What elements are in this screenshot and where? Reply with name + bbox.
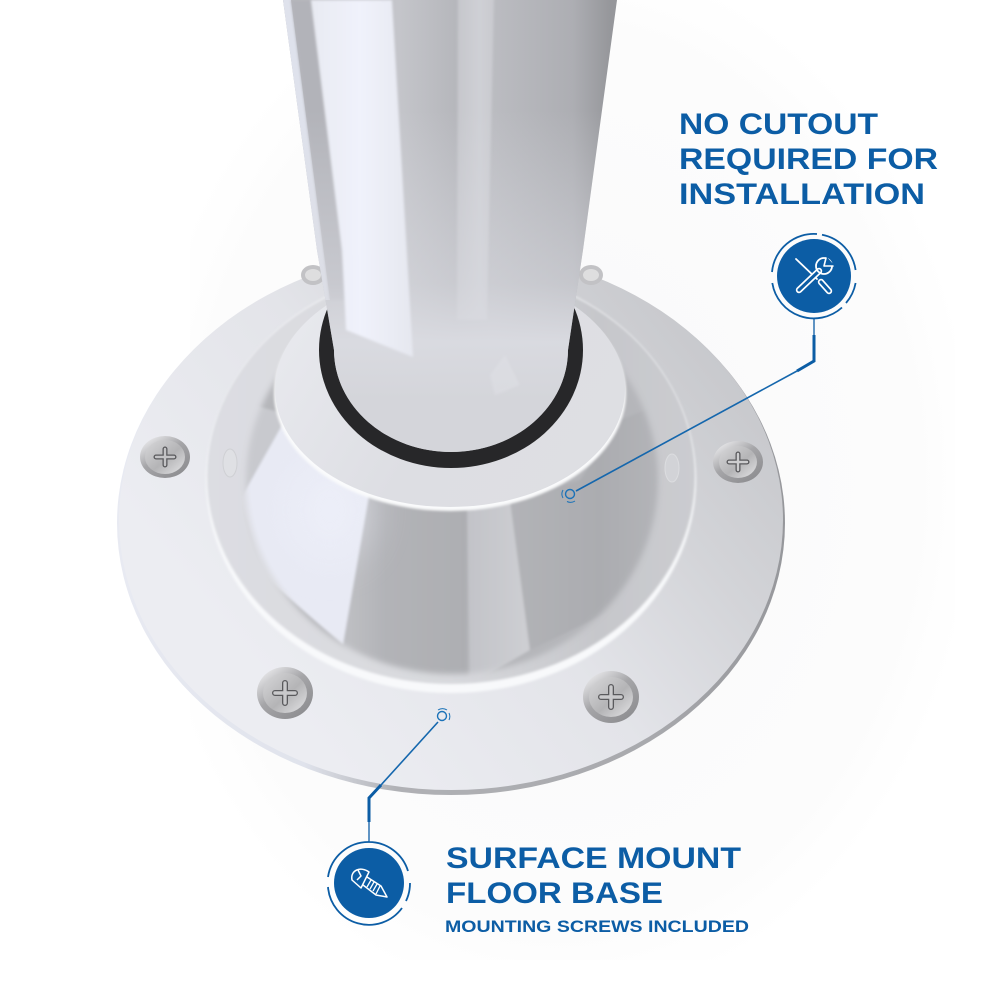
dome shading (246, 375, 659, 676)
callout: surface mount (328, 709, 749, 936)
screw: left (140, 436, 190, 478)
callout: no cutout required (562, 108, 938, 502)
screw: rear left (301, 265, 325, 285)
heading: NO CUTOUT (679, 108, 878, 141)
outer flange (117, 250, 785, 795)
seal ring (319, 232, 583, 468)
leader line (562, 318, 814, 502)
pole (270, 0, 630, 460)
dome rivet: left (223, 449, 237, 477)
dome rivet: right (665, 454, 679, 482)
target marker (438, 709, 450, 720)
dome rim (206, 267, 696, 693)
floor base product illustration (117, 0, 785, 795)
screw: right (713, 441, 763, 483)
dome (206, 267, 696, 693)
screw: rear right (579, 265, 603, 285)
heading: REQUIRED FOR (679, 143, 938, 176)
collar (274, 271, 626, 511)
heading: SURFACE MOUNT (446, 842, 741, 875)
leader line (369, 709, 450, 842)
heading: INSTALLATION (679, 178, 925, 211)
heading (446, 842, 741, 910)
target marker (562, 490, 575, 502)
subheading: MOUNTING SCREWS INCLUDED (445, 917, 749, 936)
icon: wrench and screwdriver (772, 234, 856, 318)
screw: front right (583, 671, 639, 723)
heading: FLOOR BASE (446, 877, 663, 910)
heading (679, 108, 938, 211)
screw: front left (257, 667, 313, 719)
icon: screw (328, 842, 410, 925)
